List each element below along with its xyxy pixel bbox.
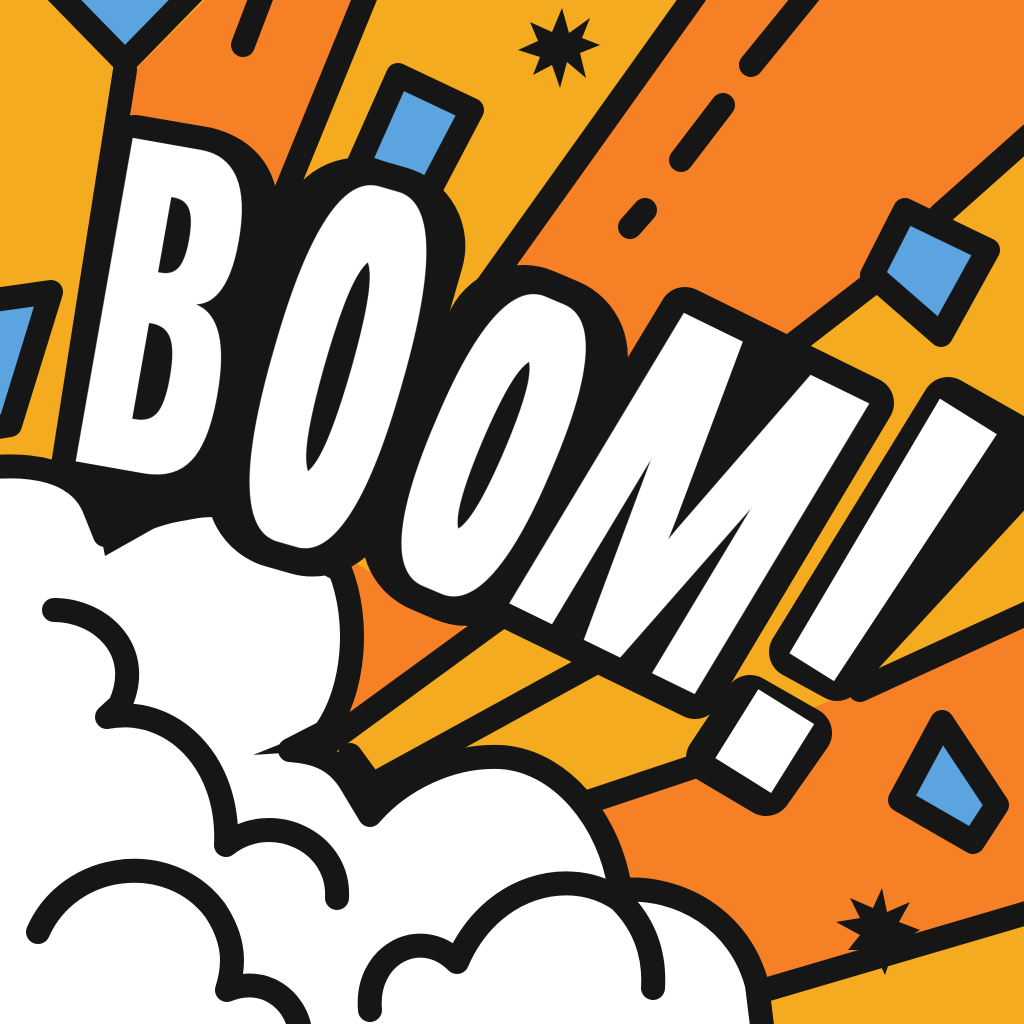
letter O: O <box>341 211 640 693</box>
icon: star bottom <box>836 888 920 975</box>
letter M: M <box>445 219 934 787</box>
icon: blue square right <box>872 210 988 335</box>
icon: blue shard right <box>900 722 997 842</box>
cloud inner curls <box>38 610 653 1024</box>
letter B: B <box>53 51 273 589</box>
orange ray: centre <box>300 560 470 745</box>
icon: blue shard left <box>0 292 51 430</box>
cloud <box>0 466 765 1024</box>
cloud wedge left <box>60 470 215 556</box>
letter backing <box>80 141 1024 790</box>
cloud wedge middle <box>253 722 335 755</box>
icon: blue square top <box>358 75 472 190</box>
orange ray: top left <box>130 0 365 250</box>
letter O: O <box>195 90 476 661</box>
icon: top-left blue diamond <box>42 0 208 62</box>
dashes <box>243 0 812 227</box>
icon: star top <box>518 8 600 88</box>
orange ray: lower right <box>590 615 1024 990</box>
orange ray: top right <box>490 0 1024 400</box>
